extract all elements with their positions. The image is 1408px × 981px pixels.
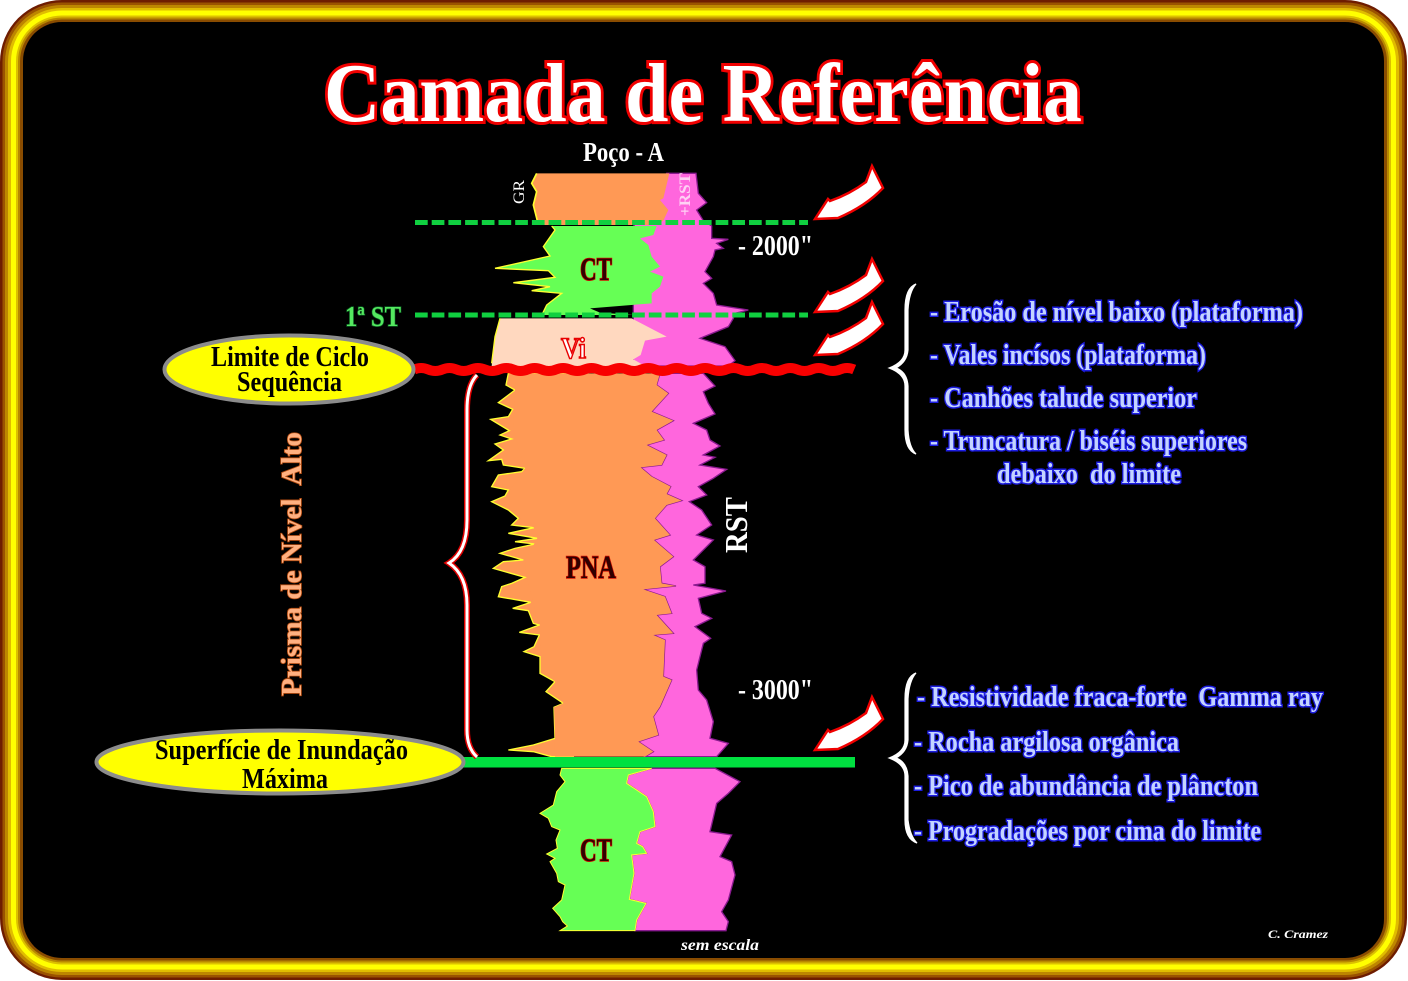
- rotated label: highstand prism: Prisma de Nível Alto: [277, 432, 308, 696]
- list: sequence boundary criteria: - Truncatura / biséis superiores: [930, 426, 1247, 457]
- unit label: CT lower: CT: [580, 833, 612, 869]
- list: flooding surface criteria: - Progradações por cima do limite: [914, 816, 1261, 847]
- arrow: sequence boundary: [815, 302, 883, 355]
- list: sequence boundary criteria: - Erosão de nível baixo (plataforma): [930, 297, 1303, 328]
- list: sequence boundary criteria: - Vales incísos (plataforma): [930, 340, 1206, 371]
- ellipse: maximum flooding surface: Máxima: [242, 764, 328, 795]
- log: lower CT section: [540, 768, 740, 931]
- log label: +RST: +RST: [677, 173, 694, 216]
- green line: maximum flooding surface: [460, 757, 855, 768]
- title: Camada de Referência: [324, 47, 1082, 140]
- label: 3000 depth: - 3000": [738, 675, 813, 706]
- list: flooding surface criteria: [914, 682, 1323, 847]
- list: sequence boundary criteria: - Canhões talude superior: [930, 383, 1197, 414]
- unit label: PNA: PNA: [566, 550, 616, 586]
- note: not to scale: sem escala: [680, 937, 759, 954]
- brace: sequence boundary list: [889, 284, 916, 454]
- arrow: 1st ST: [815, 259, 883, 312]
- dashed line: upper surface: [415, 220, 808, 225]
- well heading: Poço - A: [583, 137, 664, 167]
- ellipse: sequence cycle boundary: Limite de Ciclo: [211, 342, 369, 373]
- arrow: upper surface: [815, 166, 883, 219]
- log: PNA section: [488, 373, 728, 757]
- ellipse: sequence cycle boundary: [164, 336, 414, 404]
- brace: flooding surface list: [889, 673, 917, 843]
- list: flooding surface criteria: - Rocha argilosa orgânica: [914, 727, 1179, 758]
- brace: highstand prism extent: [449, 375, 477, 757]
- list: flooding surface criteria: - Resistividade fraca-forte Gamma ray: [917, 682, 1323, 713]
- wavy red line: sequence boundary: [414, 368, 854, 371]
- credit: C. Cramez: [1268, 927, 1328, 941]
- dashed line: 1st ST: [415, 312, 808, 318]
- label: RST: RST: [718, 497, 754, 553]
- label: 2000 depth: - 2000": [738, 231, 813, 262]
- unit label: CT upper: CT: [580, 252, 612, 288]
- log label: GR: GR: [511, 180, 528, 204]
- label: 1st ST: 1ª ST: [345, 301, 401, 333]
- arrow: maximum flooding surface: [815, 697, 883, 750]
- list: sequence boundary criteria: debaixo do limite: [997, 459, 1181, 490]
- log: upper section: [492, 173, 748, 366]
- list: flooding surface criteria: - Pico de abundância de plâncton: [914, 771, 1258, 802]
- list: sequence boundary criteria: [930, 297, 1303, 490]
- ellipse: maximum flooding surface: Superfície de Inundação: [155, 735, 408, 766]
- ellipse: maximum flooding surface: [96, 730, 464, 795]
- ellipse: sequence cycle boundary: Sequência: [237, 367, 342, 398]
- well log chart: [488, 173, 748, 931]
- unit label: Vi: Vi: [561, 332, 586, 365]
